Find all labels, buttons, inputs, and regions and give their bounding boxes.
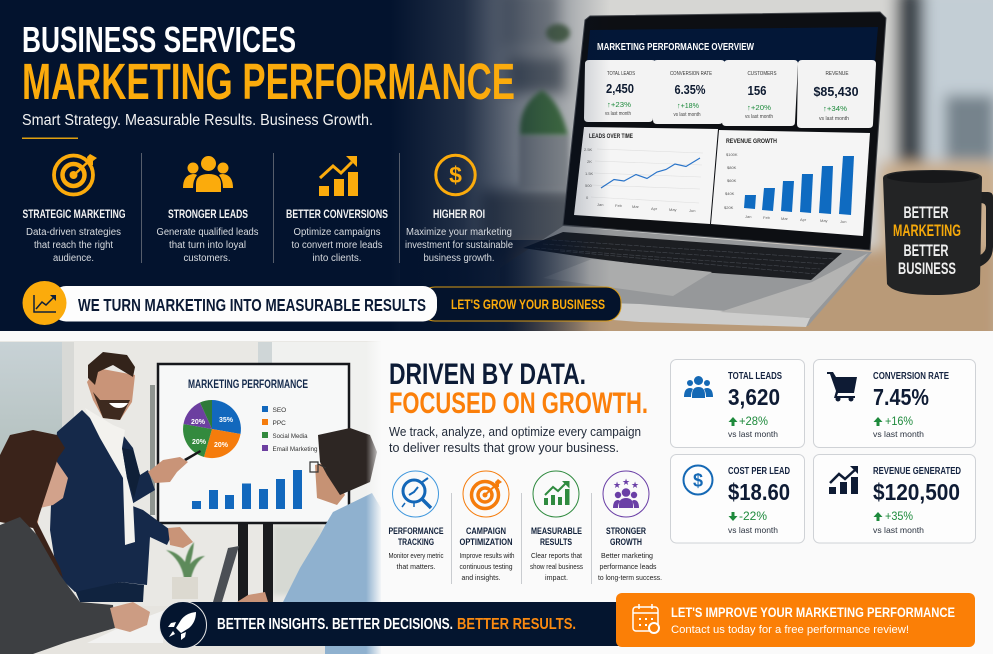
feature: campaign optimization: continuous testing [460, 562, 512, 571]
feature: strategic marketing [22, 154, 126, 264]
pie legend: Social Media [272, 433, 308, 440]
feature: stronger leads: Generate qualified leads [156, 227, 258, 238]
feature: higher roi: investment for sustainable [405, 240, 513, 251]
paragraph: to deliver results that grow your business. [389, 440, 619, 455]
screen header [587, 27, 878, 62]
kpi: revenue generated: +35% [885, 511, 913, 523]
kpi: total leads: TOTAL LEADS [728, 371, 782, 382]
icon: dollar blue: $ [693, 470, 703, 490]
plant [166, 542, 205, 599]
heading [24, 26, 514, 100]
icon: green chart [533, 471, 579, 517]
feature: stronger leads: that turn into loyal [169, 240, 246, 251]
kpi: total leads: 3,620 [728, 384, 780, 410]
chart: revenue growth: Jun [840, 219, 846, 224]
blazer [0, 517, 115, 654]
feature: better conversions: into clients. [312, 253, 362, 264]
feature: higher roi [405, 155, 513, 264]
kpi: revenue generated: vs last month [873, 525, 924, 535]
icon: team with stars: ★ [622, 477, 630, 487]
chart: leads over time: Apr [651, 206, 658, 211]
chart: revenue growth: $100K [726, 152, 738, 157]
card: total leads: TOTAL LEADS [607, 71, 635, 77]
feature: stronger growth: STRONGER [606, 526, 646, 537]
chart: revenue growth: REVENUE GROWTH [726, 138, 777, 145]
heading: BUSINESS SERVICES [22, 19, 296, 60]
feature: stronger growth: performance leads [600, 562, 657, 571]
chart: leads over time: 500 [585, 183, 592, 188]
mug [883, 170, 993, 295]
card: conversion rate [653, 60, 725, 124]
card: revenue: ↑+34% [823, 104, 847, 113]
card: customers [722, 60, 798, 126]
feature: performance tracking: PERFORMANCE [388, 526, 444, 537]
card: conversion rate: ↑+18% [677, 101, 699, 110]
icon: magnifier clock [392, 471, 438, 517]
feature: campaign optimization [460, 471, 514, 582]
feature: campaign optimization: Improve results with [460, 551, 514, 560]
feature: measurable results: Clear reports that [531, 551, 583, 560]
card: revenue: $85,430 [814, 84, 858, 99]
pie chart [183, 400, 241, 458]
banner [22, 281, 621, 325]
feature: stronger leads [156, 156, 258, 264]
man hand [237, 592, 268, 602]
screen title: MARKETING PERFORMANCE OVERVIEW [597, 41, 754, 53]
feature: higher roi: HIGHER ROI [433, 209, 485, 221]
glasses [310, 462, 326, 472]
feature: measurable results: show real business [530, 562, 583, 571]
feature: stronger growth: GROWTH [610, 537, 642, 548]
chart: revenue growth: Apr [800, 217, 807, 222]
feature: stronger growth [598, 471, 662, 582]
card: conversion rate: CONVERSION RATE [670, 71, 712, 77]
mug text [894, 206, 960, 274]
chart: leads over time: 1.5K [585, 171, 594, 176]
feature: stronger growth: to long-term success. [598, 573, 662, 582]
feature: strategic marketing: STRATEGIC MARKETING [22, 209, 126, 221]
feature: strategic marketing: Data-driven strategies [26, 227, 121, 238]
face [315, 462, 345, 505]
feature: stronger leads: STRONGER LEADS [168, 209, 248, 221]
card: revenue: REVENUE [826, 71, 849, 77]
laptop [500, 12, 886, 327]
pie chart: 20% [192, 439, 207, 446]
feature: better conversions: to convert more leads [292, 240, 382, 251]
chart: leads over time: LEADS OVER TIME [589, 134, 633, 140]
feature: higher roi: Maximize your marketing [406, 227, 512, 238]
woman [0, 430, 150, 654]
kpi: conversion rate: +16% [885, 416, 913, 428]
feature: strategic marketing: that reach the right [34, 240, 113, 251]
button: grow: LET'S GROW YOUR BUSINESS [451, 297, 605, 312]
icon: cart [827, 372, 857, 402]
heading: driven by data: FOCUSED ON GROWTH. [389, 387, 648, 420]
kpi: cost per lead: COST PER LEAD [728, 466, 790, 477]
card: total leads: vs last month [605, 111, 631, 117]
icon: team with stars: ★ [631, 480, 639, 490]
chart: leads over time: 0 [586, 195, 589, 200]
kpi: cost per lead: -22% [739, 511, 767, 523]
call to action: Contact us today for a free performance review! [671, 624, 909, 636]
chart: revenue growth [711, 130, 870, 236]
card: total leads [584, 60, 656, 122]
icon: calendar [633, 604, 659, 633]
feature: performance tracking: TRACKING [398, 537, 434, 548]
pie chart: 20% [214, 442, 229, 449]
kpi: revenue generated [814, 454, 976, 543]
chart: revenue growth: Feb [763, 215, 771, 220]
paragraph: We track, analyze, and optimize every campaign [389, 424, 641, 439]
pie chart: 35% [219, 417, 234, 424]
chart: leads over time: 2.5K [584, 147, 593, 152]
pie legend [262, 406, 318, 453]
call to action [616, 593, 975, 647]
laptop bezel [563, 12, 886, 250]
seated man [237, 428, 381, 654]
heading: driven by data: DRIVEN BY DATA. [389, 358, 586, 391]
chart: leads over time: May [669, 207, 677, 212]
bar: better insights: BETTER INSIGHTS. BETTER DECISIONS. [217, 616, 453, 633]
kpi: cost per lead: $18.60 [728, 479, 790, 505]
heading: MARKETING PERFORMANCE [22, 53, 515, 110]
kpi: cost per lead: vs last month [728, 525, 778, 535]
feature: strategic marketing: audience. [53, 253, 94, 264]
icon: people blue [684, 376, 713, 398]
icon: line chart badge [22, 281, 66, 325]
chart: revenue growth: $40K [725, 191, 735, 196]
feature: measurable results: RESULTS [540, 537, 572, 548]
feature: measurable results [530, 471, 583, 582]
feature: stronger leads: customers. [184, 253, 230, 264]
card: conversion rate: vs last month [674, 112, 701, 118]
meeting photo [0, 341, 382, 654]
panel: top hero [0, 0, 993, 350]
card: total leads: 2,450 [606, 81, 634, 96]
chart: leads over time: Mar [632, 204, 640, 209]
icon: target [54, 154, 97, 194]
bar: better insights [160, 602, 625, 648]
lapel [122, 448, 140, 498]
photo fade [366, 341, 382, 654]
icon: rocket badge [160, 602, 206, 648]
card: customers: vs last month [745, 114, 773, 120]
icon: chart dark [829, 466, 858, 494]
feature: measurable results: MEASURABLE [531, 526, 582, 537]
pie legend: Email Marketing [272, 446, 318, 453]
feature: stronger growth: Better marketing [601, 551, 653, 560]
chart: revenue growth: Jan [745, 214, 751, 219]
laptop base [500, 226, 872, 326]
navy overlay [0, 0, 610, 331]
icon: dollar: $ [449, 162, 462, 188]
shirt [283, 493, 381, 654]
kpi: conversion rate [814, 360, 976, 448]
feature: campaign optimization: OPTIMIZATION [460, 537, 513, 548]
paragraph [389, 424, 641, 455]
woman face [20, 450, 68, 530]
panel: bottom section [0, 341, 976, 654]
lower navy overlay [400, 240, 590, 331]
chart: revenue growth: $60K [727, 178, 737, 183]
feature: campaign optimization: CAMPAIGN [466, 526, 506, 537]
card: customers: CUSTOMERS [748, 71, 777, 77]
button: grow [420, 287, 621, 321]
trousers [75, 582, 144, 602]
head [87, 352, 135, 420]
chart: leads over time: 2K [587, 159, 592, 164]
chart: leads over time: Jan [597, 202, 603, 207]
presentation screen [158, 364, 349, 523]
office photo background [468, 0, 993, 331]
icon: target orange [463, 471, 509, 517]
kpi: revenue generated: $120,500 [873, 479, 960, 505]
pointing hand [148, 457, 188, 483]
kpi: revenue generated: REVENUE GENERATED [873, 466, 961, 477]
bar: better insights: BETTER RESULTS. [457, 616, 576, 633]
screen stand [238, 523, 273, 602]
feature: better conversions [286, 156, 388, 264]
chart: leads over time: Jun [689, 208, 695, 213]
mug text: BUSINESS [898, 259, 956, 278]
woman hair [0, 430, 65, 578]
kpi: total leads: vs last month [728, 429, 778, 439]
presentation screen: MARKETING PERFORMANCE [188, 379, 308, 391]
feature: performance tracking [388, 471, 444, 571]
chart: revenue growth: May [820, 218, 828, 223]
feature: campaign optimization: and insights. [462, 573, 500, 582]
table [37, 606, 381, 654]
icon: team with stars [603, 471, 649, 517]
feature: higher roi: business growth. [424, 253, 494, 264]
card: conversion rate: 6.35% [674, 82, 706, 97]
icon: team with stars: ★ [613, 480, 621, 490]
banner: WE TURN MARKETING INTO MEASURABLE RESULTS [78, 295, 426, 315]
icon: growth chart [319, 156, 358, 196]
kpi: conversion rate: CONVERSION RATE [873, 371, 949, 382]
feature: measurable results: impact. [545, 573, 568, 582]
kpi: cost per lead [670, 454, 804, 543]
card: customers: ↑+20% [747, 103, 771, 112]
laptop back [213, 546, 239, 602]
mug text: MARKETING [893, 221, 961, 240]
chart: revenue growth: $80K [727, 165, 737, 170]
presenter [50, 352, 201, 602]
suit [50, 410, 173, 592]
feature: performance tracking: Monitor every metric [388, 551, 444, 560]
icon: people [183, 156, 233, 192]
heading: driven by data [389, 358, 648, 420]
pie chart: 20% [191, 419, 206, 426]
mug text: BETTER [904, 203, 948, 222]
kpi: conversion rate: 7.45% [873, 384, 929, 410]
tagline: Smart Strategy. Measurable Results. Business Growth. [22, 112, 373, 129]
chart: leads over time [574, 127, 718, 224]
hair [318, 428, 377, 495]
chart: leads over time: Feb [615, 203, 623, 208]
card: total leads: ↑+23% [607, 100, 631, 109]
kpi: total leads: +28% [739, 416, 768, 428]
chart: revenue growth: Mar [781, 216, 789, 221]
card: revenue [797, 60, 876, 128]
kpi: total leads [670, 360, 804, 448]
shirt [85, 408, 135, 545]
woman hand [110, 602, 150, 632]
card: revenue: vs last month [819, 116, 849, 122]
mug text: BETTER [904, 241, 948, 260]
lower hand [168, 527, 193, 548]
kpi: conversion rate: vs last month [873, 429, 924, 439]
bar chart [192, 470, 302, 509]
feature: better conversions: Optimize campaigns [294, 227, 380, 238]
pie legend: PPC [272, 420, 286, 427]
feature: better conversions: BETTER CONVERSIONS [286, 209, 388, 221]
keyboard keys [535, 240, 834, 274]
feature: performance tracking: that matters. [396, 562, 436, 571]
pointer [184, 450, 201, 461]
pie legend: SEO [272, 407, 286, 414]
card: customers: 156 [748, 83, 766, 98]
chart: revenue growth: $20K [724, 205, 734, 210]
